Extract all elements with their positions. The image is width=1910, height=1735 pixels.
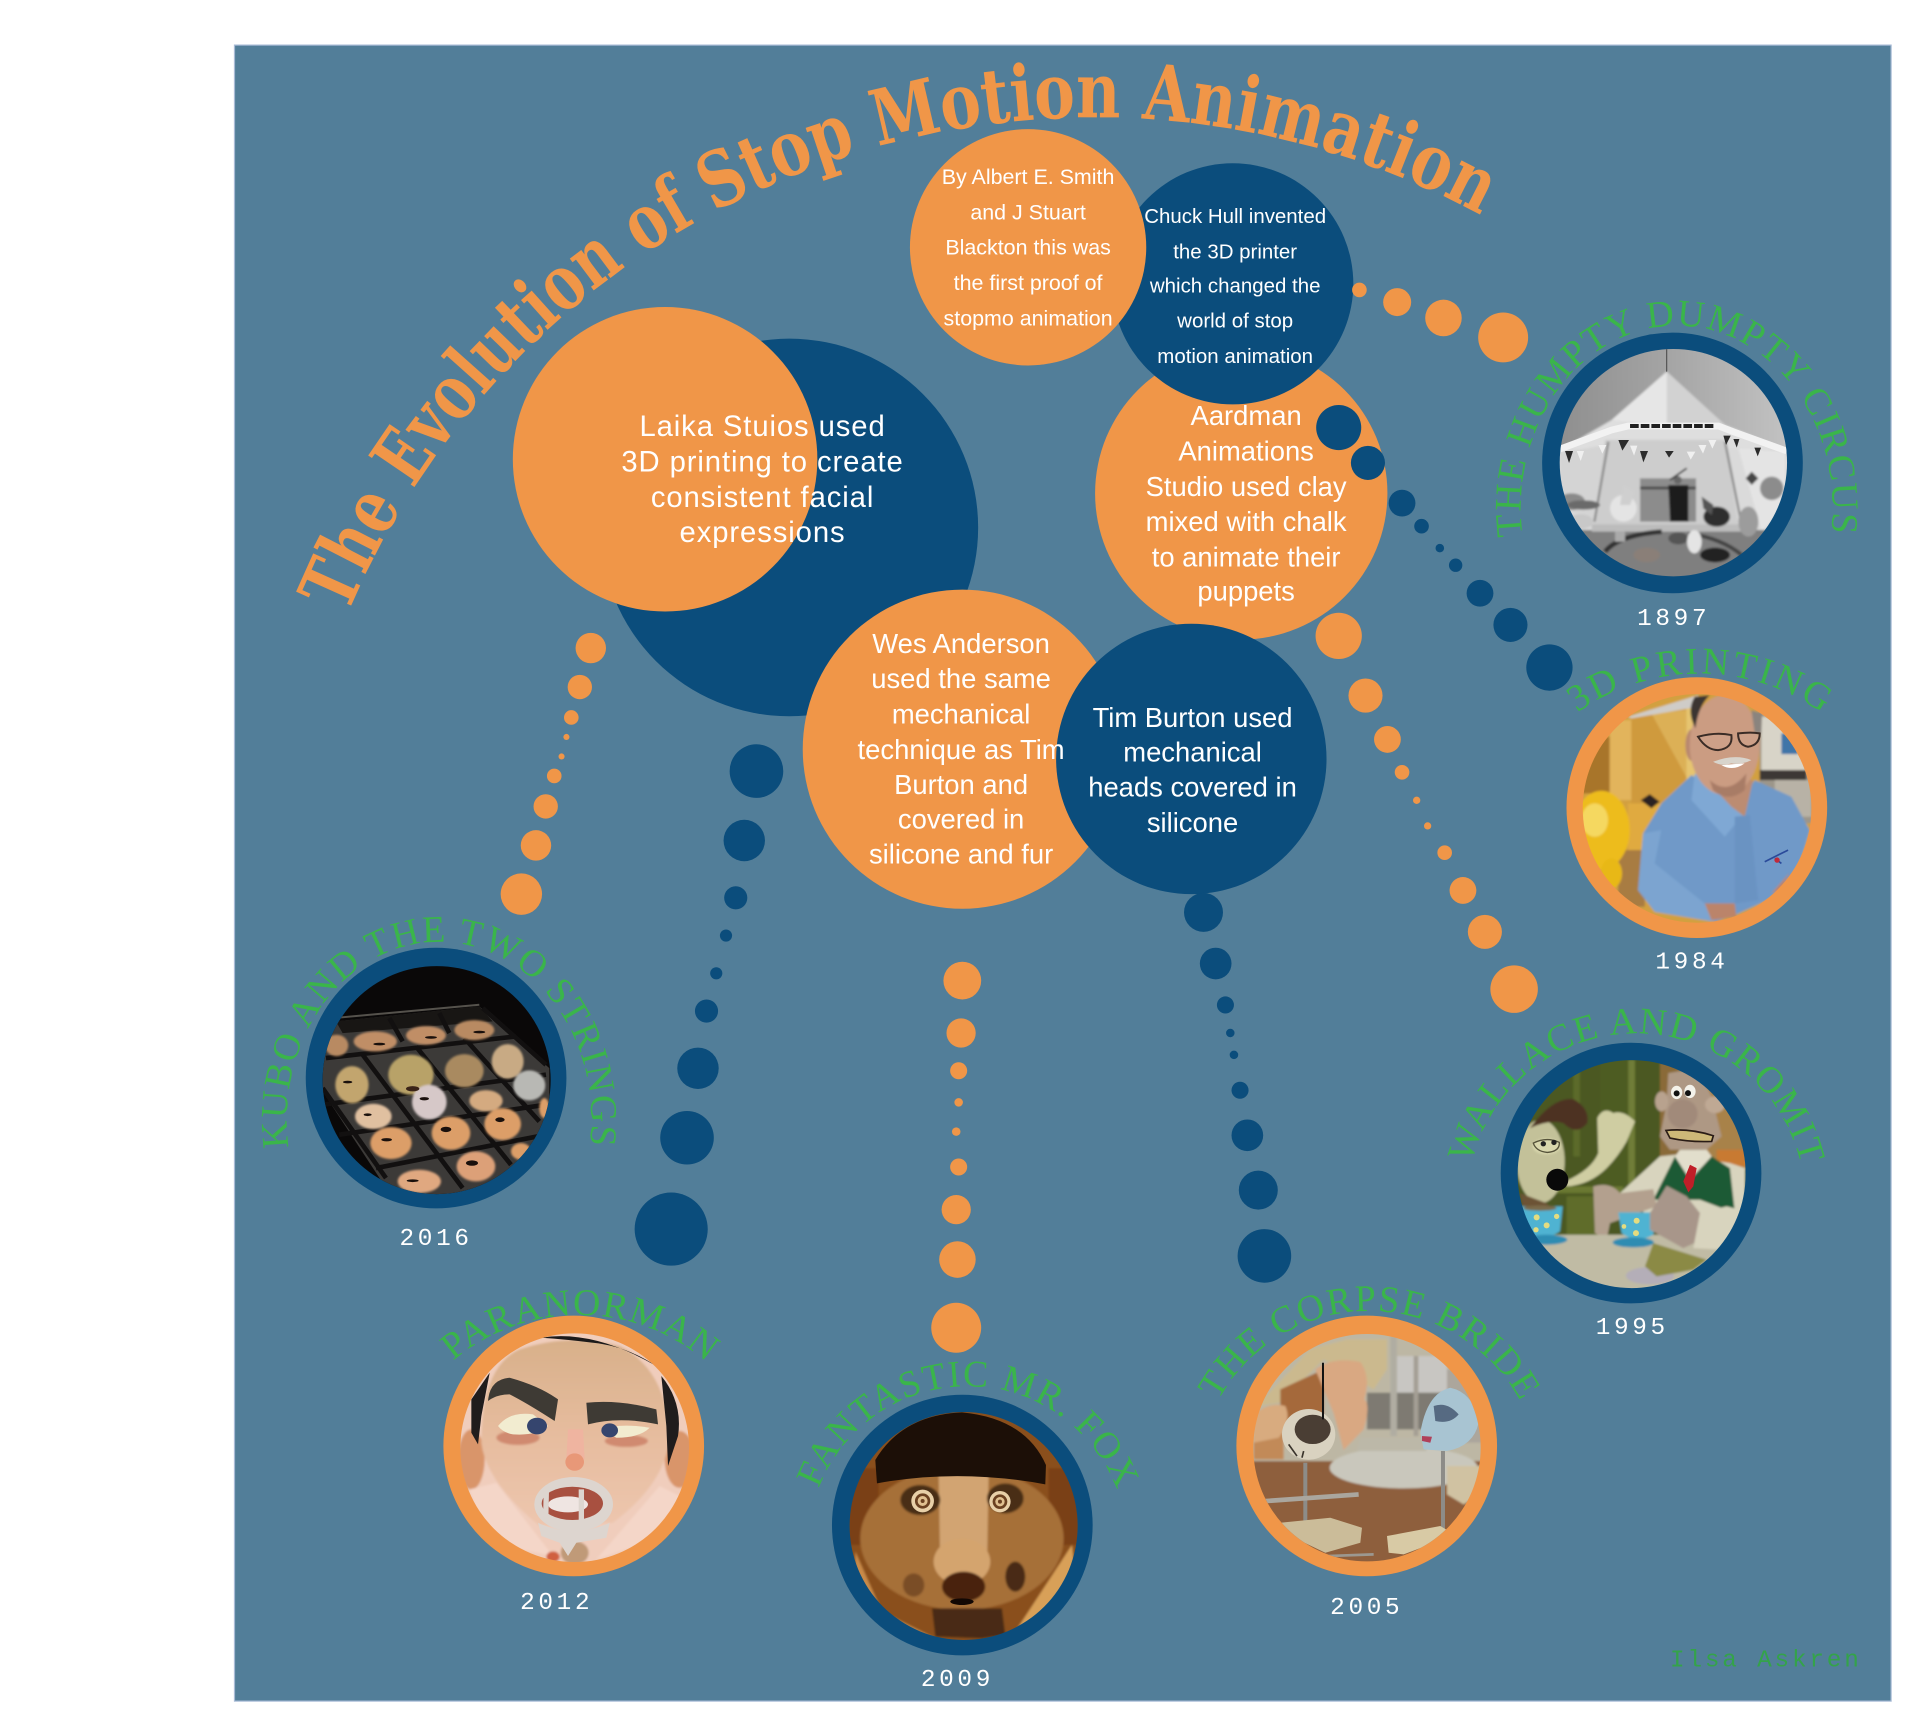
text: Wes Anderson: silicone and fur xyxy=(869,839,1053,870)
text: Albert Smith: and J Stuart xyxy=(970,200,1086,224)
photo: Chuck Hull xyxy=(1582,694,1812,923)
text: Laika: Laika Stuios used xyxy=(639,411,886,443)
dots to Kubo xyxy=(501,633,606,915)
text: Laika: expressions xyxy=(680,517,846,549)
label: Fantastic Mr. Fox: FANTASTIC MR. FOX xyxy=(796,1362,1139,1489)
text: Wes Anderson: covered in xyxy=(898,803,1024,834)
label: The Corpse Bride: THE CORPSE BRIDE xyxy=(1197,1286,1540,1399)
medallion: The Humpty Dumpty Circus xyxy=(1496,300,1858,594)
dots to Humpty Dumpty Circus xyxy=(1352,283,1528,362)
medallion: Wallace and Gromit xyxy=(1447,1008,1825,1304)
label: The Humpty Dumpty Circus: THE HUMPTY DUMPTY CIRCUS xyxy=(1496,300,1858,538)
text: Chuck Hull: which changed the xyxy=(1149,274,1320,297)
label: Kubo and the Two Strings: KUBO AND THE TWO STRINGS xyxy=(262,916,616,1148)
label: Wallace and Gromit: WALLACE AND GROMIT xyxy=(1447,1008,1825,1160)
dots to The Corpse Bride xyxy=(1184,893,1291,1283)
text: Wes Anderson: used the same xyxy=(871,663,1051,694)
text: Aardman: mixed with chalk xyxy=(1146,506,1347,537)
year 2005: 2005 xyxy=(1330,1595,1403,1622)
bubble: Albert Smith and Chuck Hull circles xyxy=(910,129,1387,640)
text: Aardman xyxy=(1146,400,1347,607)
year 2012: 2012 xyxy=(520,1590,593,1617)
year 1897: 1897 xyxy=(1637,606,1710,633)
text: Chuck Hull xyxy=(1144,205,1326,368)
author credit: Ilsa Askren xyxy=(1670,1647,1859,1674)
text: Aardman: Animations xyxy=(1178,435,1314,466)
text: Tim Burton: Tim Burton used xyxy=(1093,702,1293,733)
year 1995: 1995 xyxy=(1596,1315,1669,1342)
photo: Mr. Fox face xyxy=(842,1405,1082,1645)
text: Wes Anderson: Burton and xyxy=(894,769,1028,800)
text: Albert Smith: By Albert E. Smith xyxy=(942,165,1114,189)
text: Chuck Hull: motion animation xyxy=(1157,345,1313,368)
medallion: The Corpse Bride xyxy=(1197,1286,1540,1576)
text: Chuck Hull: the 3D printer xyxy=(1173,240,1297,263)
text: Wes Anderson: technique as Tim xyxy=(858,734,1065,765)
text: Wes Anderson: mechanical xyxy=(892,699,1030,730)
text: Chuck Hull: world of stop xyxy=(1176,310,1293,333)
text: Tim Burton: mechanical xyxy=(1123,736,1262,767)
year 1984: 1984 xyxy=(1655,949,1729,976)
year 2009: 2009 xyxy=(921,1667,994,1694)
dots to Wallace and Gromit xyxy=(1316,613,1538,1013)
dots to 3D printing xyxy=(1316,405,1573,691)
bubble: Laika xyxy=(513,307,978,716)
text: Wes Anderson xyxy=(858,628,1065,870)
title: Stop Motion Animation xyxy=(697,62,1490,214)
bubble: Wes Anderson and Tim Burton circles xyxy=(803,590,1327,909)
medallion: Kubo and the Two Strings xyxy=(262,916,616,1208)
text: Albert Smith: Blackton this was xyxy=(945,236,1111,260)
text: Tim Burton: silicone xyxy=(1147,807,1238,838)
year 2016: 2016 xyxy=(400,1226,473,1253)
title xyxy=(296,62,1490,606)
photo: puppet heads workbench xyxy=(1253,1334,1481,1562)
title: The Evolution of xyxy=(296,171,694,606)
text: Aardman: puppets xyxy=(1197,576,1295,607)
text: Aardman: to animate their xyxy=(1152,541,1341,572)
label: ParaNorman: PARANORMAN xyxy=(438,1290,721,1360)
text: Aardman: Aardman xyxy=(1191,400,1302,431)
dots to Fantastic Mr. Fox xyxy=(931,962,981,1353)
text: Albert Smith: stopmo animation xyxy=(944,306,1113,330)
text: Albert Smith: the first proof of xyxy=(954,271,1103,295)
text: Albert Smith xyxy=(942,165,1114,330)
text: Laika: consistent facial xyxy=(651,482,874,514)
photo: Wallace and Gromit xyxy=(1510,1053,1750,1295)
photo: Norman face xyxy=(453,1326,695,1566)
text: Tim Burton: heads covered in xyxy=(1088,772,1297,803)
photo: circus model xyxy=(1560,349,1788,576)
text: Laika xyxy=(621,411,904,549)
text: Aardman: Studio used clay xyxy=(1146,471,1347,502)
text: Tim Burton xyxy=(1088,702,1297,838)
photo: tray of puppet faces xyxy=(316,958,556,1198)
medallion: ParaNorman xyxy=(438,1290,721,1576)
dots to ParaNorman xyxy=(635,744,783,1266)
text: Wes Anderson: Wes Anderson xyxy=(872,628,1050,659)
text: Laika: 3D printing to create xyxy=(621,446,904,478)
text: Chuck Hull: Chuck Hull invented xyxy=(1144,205,1326,228)
label: 3D Printing: 3D PRINTING xyxy=(1566,648,1832,711)
medallion: 3D Printing xyxy=(1566,648,1832,938)
medallion: Fantastic Mr. Fox xyxy=(796,1362,1139,1656)
